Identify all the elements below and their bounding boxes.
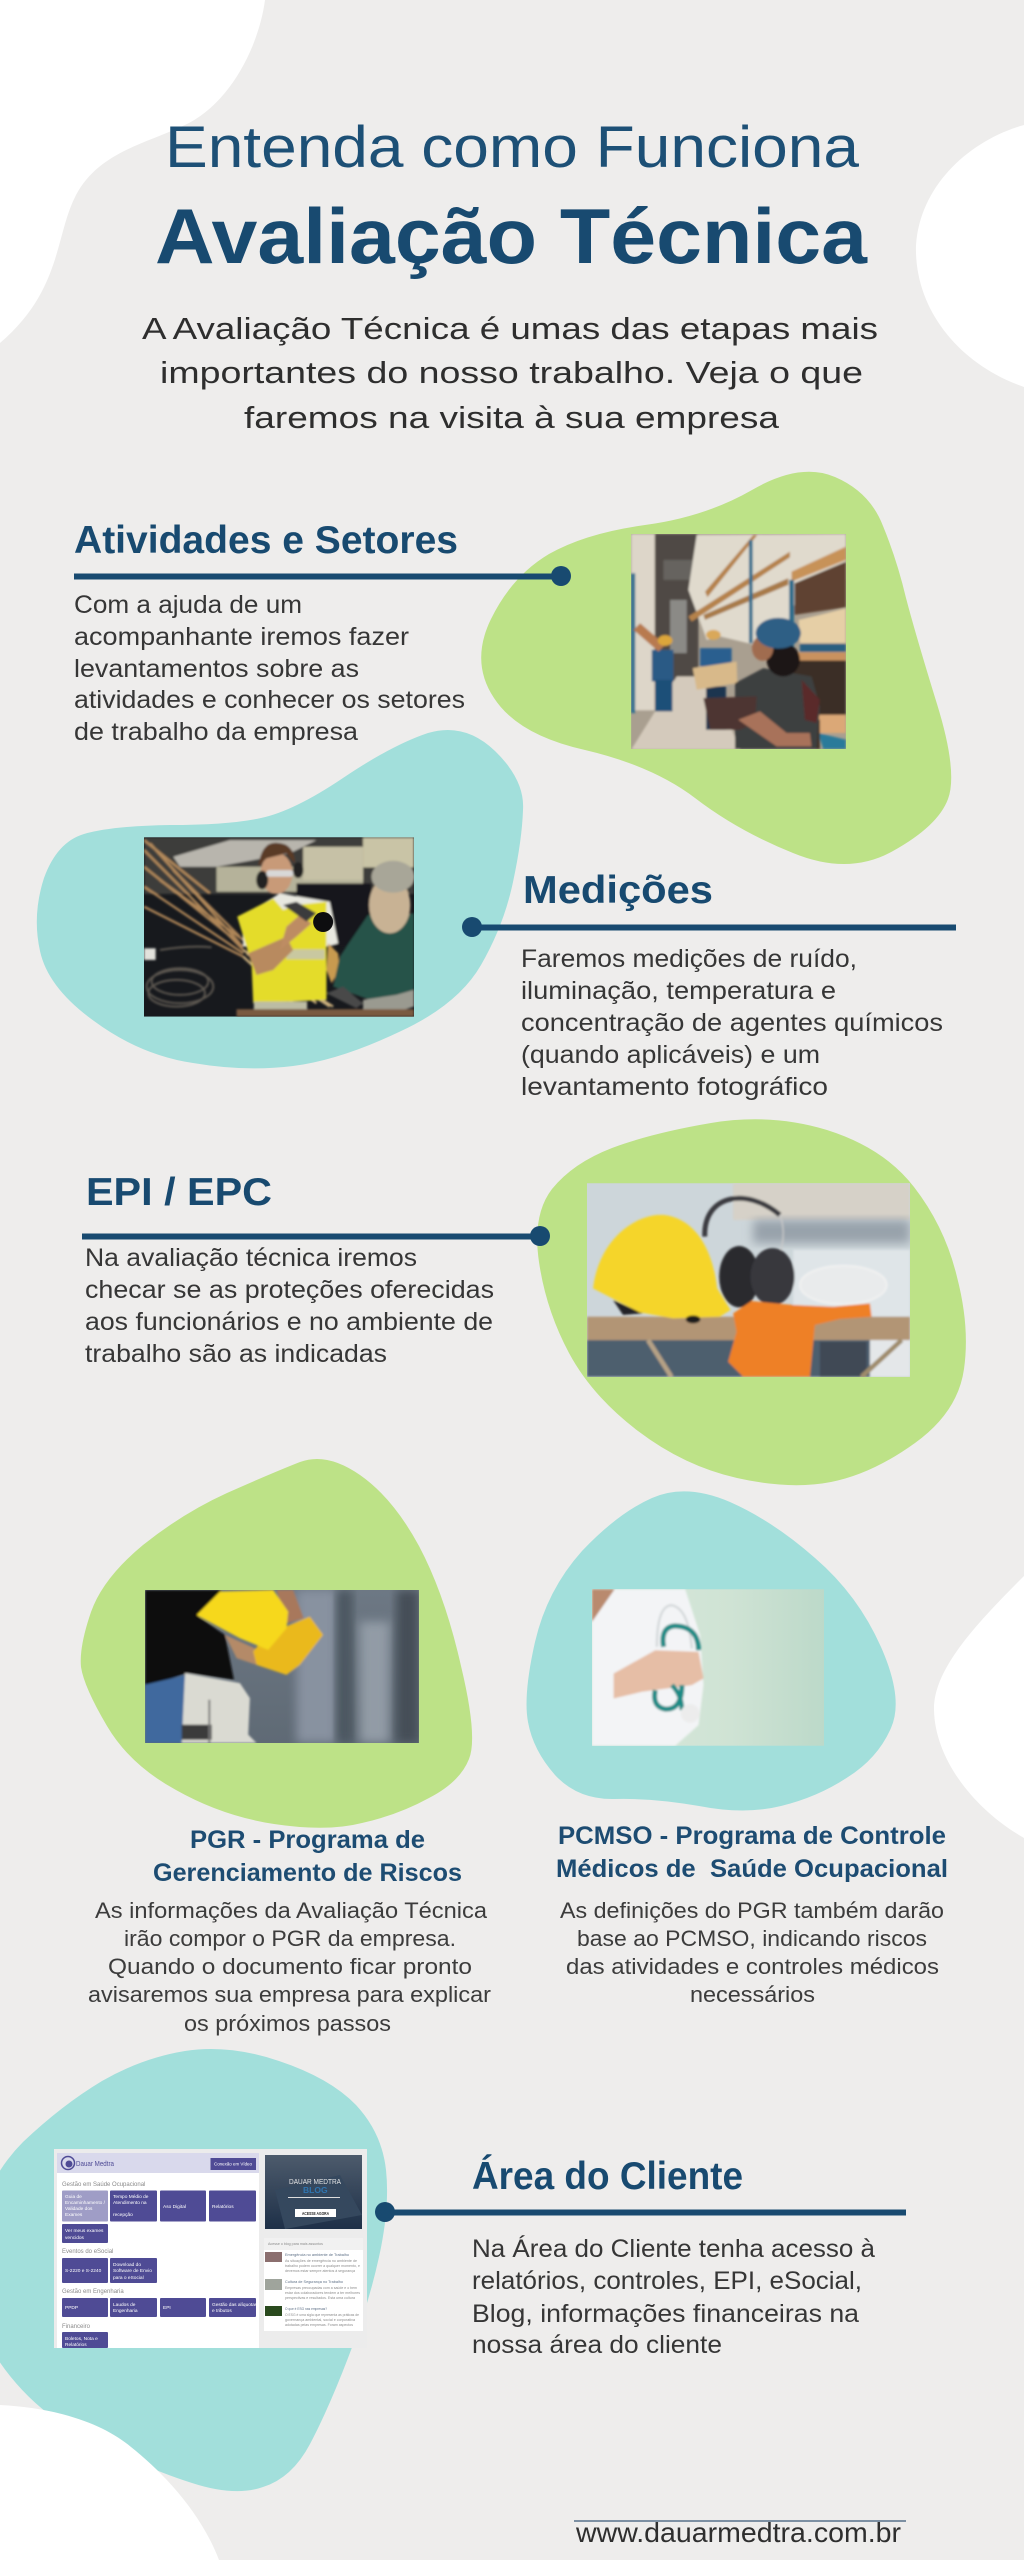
intro paragraph: faremos na visita à sua empresa — [244, 400, 780, 435]
text block: aos funcionários e no ambiente de — [85, 1308, 493, 1336]
screenshot: client area portal: Laudos de — [113, 2302, 136, 2308]
heading: PCMSO - Programa de Controle — [558, 1822, 946, 1850]
heading: Área do Cliente — [472, 2154, 743, 2198]
screenshot: client area portal — [54, 2149, 367, 2348]
text block: As informações da Avaliação Técnica — [95, 1898, 488, 1923]
text block: Blog, informações financeiras na — [472, 2300, 859, 2328]
title line one: Entenda como Funciona — [165, 115, 860, 180]
text block: iluminação, temperatura e — [521, 977, 836, 1005]
panel: EPI / EPC — [82, 1119, 966, 1485]
text block — [472, 2234, 875, 2359]
heading: Gerenciamento de Riscos — [153, 1859, 462, 1887]
connector line with dot — [82, 1226, 550, 1246]
panel: Atividades e Setores — [74, 472, 951, 864]
screenshot: client area portal: governança ambiental, social e corporativa — [285, 2318, 355, 2322]
screenshot: client area portal: Eventos do eSocial — [62, 2249, 113, 2255]
screenshot: client area portal: Ver meus exames — [65, 2228, 104, 2234]
heading — [153, 1826, 462, 1887]
text block: irão compor o PGR da empresa. — [124, 1926, 456, 1951]
screenshot: client area portal: Gestão em Saúde Ocupacional — [62, 2182, 145, 2188]
screenshot: client area portal: Cultura de Segurança no Trabalho — [285, 2279, 344, 2284]
text block: avisaremos sua empresa para explicar — [88, 1982, 491, 2007]
screenshot: client area portal: O que é ESG nas empresas? — [285, 2306, 328, 2311]
screenshot: client area portal: Emergência no ambiente de Trabalho — [285, 2252, 350, 2257]
decorative shape: top right white blob — [916, 125, 1024, 387]
panel: Medições — [37, 730, 956, 1101]
heading: Atividades e Setores — [74, 519, 458, 562]
screenshot: client area portal: Exames — [65, 2212, 83, 2218]
screenshot: client area portal: Gestão em Engenharia — [62, 2289, 124, 2295]
screenshot: client area portal: Encaminhamento / — [65, 2200, 106, 2206]
screenshot: client area portal: para o eSocial — [113, 2275, 144, 2281]
screenshot: client area portal: e tributos — [212, 2308, 232, 2314]
text block: atividades e conhecer os setores — [74, 686, 465, 714]
connector line with dot — [375, 2202, 906, 2222]
text block: de trabalho da empresa — [74, 718, 358, 746]
title block — [155, 115, 868, 280]
text block: levantamento fotográfico — [521, 1073, 828, 1101]
intro paragraph: A Avaliação Técnica é umas das etapas mais — [142, 311, 878, 346]
screenshot: client area portal: devemos estar sempre atentos à segurança — [285, 2269, 355, 2273]
screenshot: client area portal: trabalho podem ocorrer a qualquer momento, e — [285, 2264, 360, 2268]
screenshot: client area portal: Financeiro — [62, 2324, 91, 2330]
connector line with dot — [462, 917, 956, 937]
panel: PCMSO — [527, 1491, 948, 2007]
text block — [88, 1898, 491, 2036]
screenshot: client area portal: Empresas preocupadas com a saúde e o bem — [285, 2286, 357, 2290]
screenshot: client area portal: S-2220 e S-2240 — [65, 2268, 102, 2274]
panel: Área do Cliente — [0, 2049, 906, 2491]
screenshot: client area portal: DAUAR MEDTRA — [289, 2177, 341, 2186]
screenshot: client area portal: estar dos colaboradores tendem a ter melhores — [285, 2291, 360, 2295]
text block — [74, 591, 465, 746]
text block: das atividades e controles médicos — [566, 1954, 939, 1979]
text block: trabalho são as indicadas — [85, 1340, 387, 1368]
text block: As definições do PGR também darão — [560, 1898, 944, 1923]
text block: acompanhante iremos fazer — [74, 623, 409, 651]
screenshot: client area portal: adotadas pelas empresas. Foram aspectos — [285, 2323, 353, 2327]
screenshot: client area portal: O ESG é uma sigla que representa as práticas de — [285, 2313, 359, 2317]
photo: technician measuring noise — [144, 837, 414, 1017]
screenshot: client area portal: ACESSE AGORA — [302, 2211, 330, 2216]
screenshot: client area portal: Boletos, Nota e — [65, 2336, 98, 2342]
screenshot: client area portal: PPDP — [65, 2305, 78, 2311]
text block: relatórios, controles, EPI, eSocial, — [472, 2267, 862, 2295]
screenshot: client area portal: Guia de — [65, 2194, 82, 2200]
text block: base ao PCMSO, indicando riscos — [577, 1926, 927, 1951]
screenshot: client area portal: Aso Digital — [163, 2204, 186, 2210]
screenshot: client area portal: BLOG — [303, 2185, 328, 2195]
text block: checar se as proteções oferecidas — [85, 1276, 494, 1304]
intro paragraph: importantes do nosso trabalho. Veja o que — [160, 355, 863, 390]
teal blob — [527, 1491, 896, 1810]
heading: EPI / EPC — [86, 1171, 272, 1214]
screenshot: client area portal: Download do — [113, 2262, 141, 2268]
heading: PGR - Programa de — [190, 1826, 425, 1854]
screenshot: client area portal: Dauar Medtra — [76, 2159, 115, 2168]
text block: Na avaliação técnica iremos — [85, 1244, 417, 1272]
intro paragraph — [142, 311, 878, 435]
screenshot: client area portal: Conexão em Vídeo — [214, 2162, 252, 2168]
green blob — [81, 1459, 472, 1828]
text block: os próximos passos — [184, 2011, 391, 2036]
footer: website address: www.dauarmedtra.com.br — [575, 2517, 901, 2548]
screenshot: client area portal: Engenharia — [113, 2308, 138, 2314]
text block: concentração de agentes químicos — [521, 1009, 943, 1037]
screenshot: client area portal: As situações de emergência no ambiente de — [285, 2259, 357, 2263]
screenshot: client area portal: vencidos — [65, 2235, 85, 2241]
decorative shape: middle right white blob — [934, 1576, 1024, 1838]
screenshot: client area portal: Relatórios — [212, 2204, 234, 2210]
teal blob — [0, 2049, 387, 2491]
screenshot: client area portal: Acesse o blog para mais assuntos — [268, 2242, 323, 2246]
text block: Na Área do Cliente tenha acesso à — [472, 2234, 875, 2263]
screenshot: client area portal: recepção — [113, 2212, 133, 2218]
screenshot: client area portal: Atendimento na — [113, 2200, 147, 2206]
screenshot: client area portal: Relatórios — [65, 2342, 87, 2348]
text block: (quando aplicáveis) e um — [521, 1041, 820, 1069]
text block: Faremos medições de ruído, — [521, 945, 857, 973]
teal blob — [37, 730, 523, 1068]
connector line with dot — [74, 566, 571, 586]
text block — [85, 1244, 494, 1368]
heading: Medições — [523, 869, 713, 912]
text block: Quando o documento ficar pronto — [108, 1954, 472, 1979]
heading — [556, 1822, 948, 1883]
text block — [560, 1898, 944, 2007]
green blob — [537, 1119, 966, 1485]
photo: worker holding helmet — [145, 1590, 419, 1743]
screenshot: client area portal: Tempo Médio de — [113, 2194, 149, 2200]
text block: necessários — [690, 1982, 815, 2007]
photo: doctor with stethoscope — [592, 1589, 824, 1746]
screenshot: client area portal: Gestão das alíquotas — [212, 2302, 258, 2308]
screenshot: client area portal: perspectivas e resultados. Esta uma cultura — [285, 2296, 355, 2300]
photo: warehouse workers — [631, 534, 846, 749]
text block — [521, 945, 943, 1101]
panel: PGR — [81, 1459, 491, 2036]
photo: safety equipment — [587, 1183, 910, 1377]
heading: Médicos de Saúde Ocupacional — [556, 1855, 948, 1883]
green blob — [481, 472, 951, 864]
title line two: Avaliação Técnica — [155, 192, 868, 280]
decorative shape: bottom left white blob — [0, 2405, 219, 2560]
text block: nossa área do cliente — [472, 2331, 722, 2359]
screenshot: client area portal: EPI — [163, 2305, 171, 2311]
decorative shape: top left white blob — [0, 0, 265, 343]
text block: levantamentos sobre as — [74, 655, 359, 683]
screenshot: client area portal: Software de Envio — [113, 2268, 152, 2274]
screenshot: client area portal: Validade dos — [65, 2206, 93, 2212]
text block: Com a ajuda de um — [74, 591, 302, 619]
